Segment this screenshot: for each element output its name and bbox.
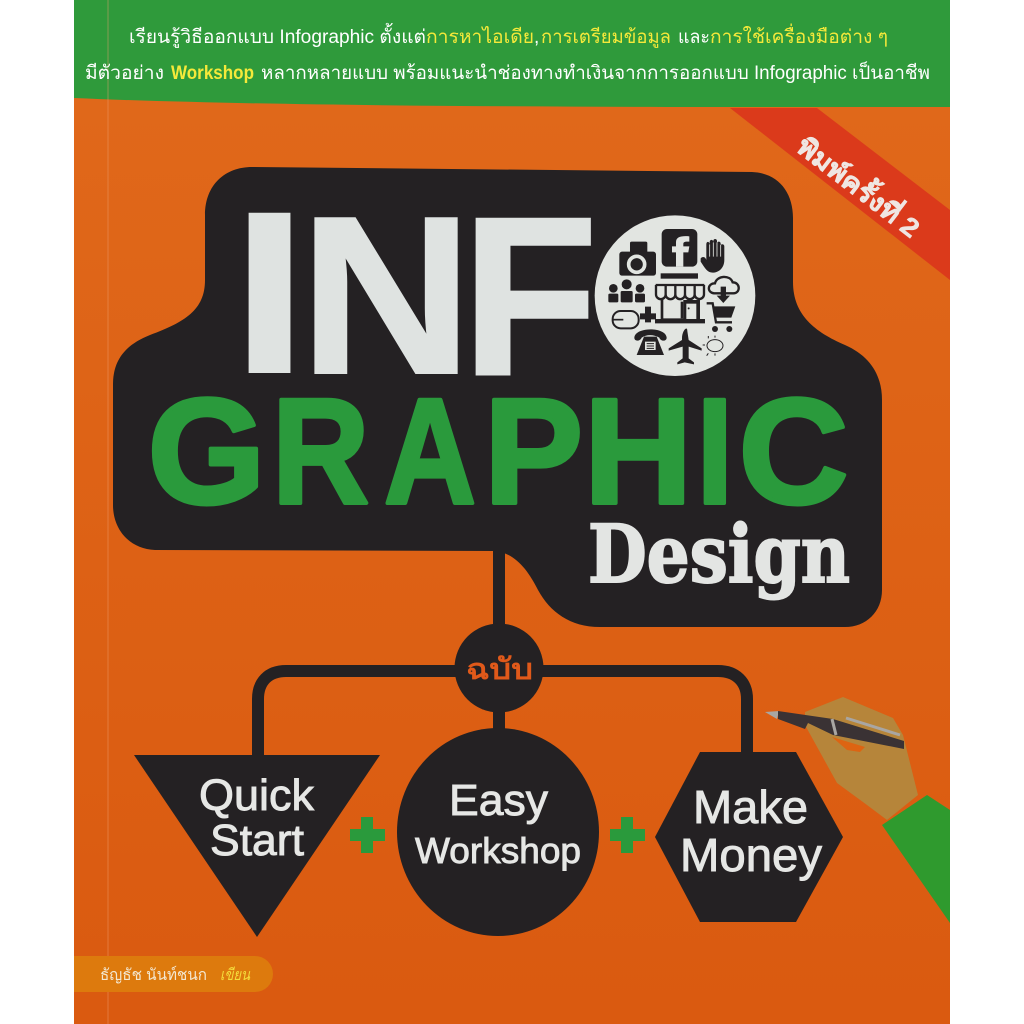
title: GRAPHIC: G (148, 367, 266, 535)
red edition ribbon: พิมพ์ครั้งที่ 2 (791, 127, 928, 244)
hand (805, 697, 918, 820)
icon: light bulb (703, 336, 723, 356)
icon: camera (619, 242, 656, 276)
icon: airplane (669, 329, 702, 364)
icon: plus (640, 307, 656, 322)
icon: shopping cart (707, 303, 735, 332)
icon: group of people (608, 279, 645, 302)
hexagon: Make Money: Make (693, 781, 808, 833)
triangle: Quick Start (134, 755, 380, 937)
pen (765, 711, 904, 749)
icon: store (655, 273, 705, 323)
icon: telephone (634, 329, 667, 355)
icon: computer mouse (613, 311, 639, 328)
author pill (74, 956, 273, 992)
title: INF: N (299, 169, 473, 421)
top green banner (74, 0, 950, 107)
title: GRAPHIC: P (484, 367, 583, 535)
title: GRAPHIC: C (739, 367, 848, 535)
title: INF: F (462, 170, 598, 422)
author pill: ธัญธัช นันท์ชนก (100, 965, 207, 984)
icon: facebook (662, 229, 697, 267)
hexagon: Make Money: Money (680, 829, 822, 881)
banner text: Workshop (171, 63, 254, 84)
icon: raised hand (701, 239, 724, 273)
title: Design: Design (588, 507, 850, 601)
banner text: หลากหลายแบบ พร้อมแนะนำช่องทางทำเงินจากการออกแบบ Infographic เป็นอาชีพ (261, 60, 930, 84)
title: INF (229, 163, 597, 423)
banner text: การหาไอเดีย (426, 26, 534, 48)
circle: Easy Workshop: Workshop (415, 830, 581, 871)
banner text: การเตรียมข้อมูล (541, 26, 671, 48)
hexagon: Make Money (655, 752, 843, 922)
banner text (85, 23, 930, 84)
edition circle (454, 624, 544, 712)
banner text: การใช้เครื่องมือต่าง ๆ (710, 23, 888, 48)
plus sign (350, 817, 385, 853)
title: GRAPHIC: I (697, 367, 733, 535)
connector lines (258, 548, 747, 760)
author pill: เขียน (220, 966, 251, 984)
circle: Easy Workshop: Easy (449, 776, 548, 825)
banner text: และ (678, 27, 710, 48)
red edition ribbon (730, 108, 950, 280)
edition circle: ฉบับ (466, 654, 533, 686)
icon: cloud download (709, 277, 739, 303)
icon circle (595, 215, 755, 376)
black title blob (113, 167, 882, 627)
plus sign (610, 817, 645, 853)
triangle: Quick Start: Start (210, 816, 304, 865)
orange background (74, 90, 950, 1024)
green sleeve (882, 795, 950, 923)
banner text: , (534, 27, 539, 48)
hand holding pen (765, 697, 918, 820)
triangle: Quick Start: Quick (199, 771, 315, 820)
circle: Easy Workshop (397, 728, 599, 936)
title: INF: I (229, 163, 310, 423)
banner text: มีตัวอย่าง (85, 62, 164, 84)
title: GRAPHIC: R (272, 367, 369, 535)
title: GRAPHIC: A (384, 367, 476, 535)
title: GRAPHIC (148, 367, 848, 535)
title: GRAPHIC: H (584, 367, 692, 535)
banner text: เรียนรู้วิธีออกแบบ Infographic ตั้งแต่ (129, 23, 426, 48)
